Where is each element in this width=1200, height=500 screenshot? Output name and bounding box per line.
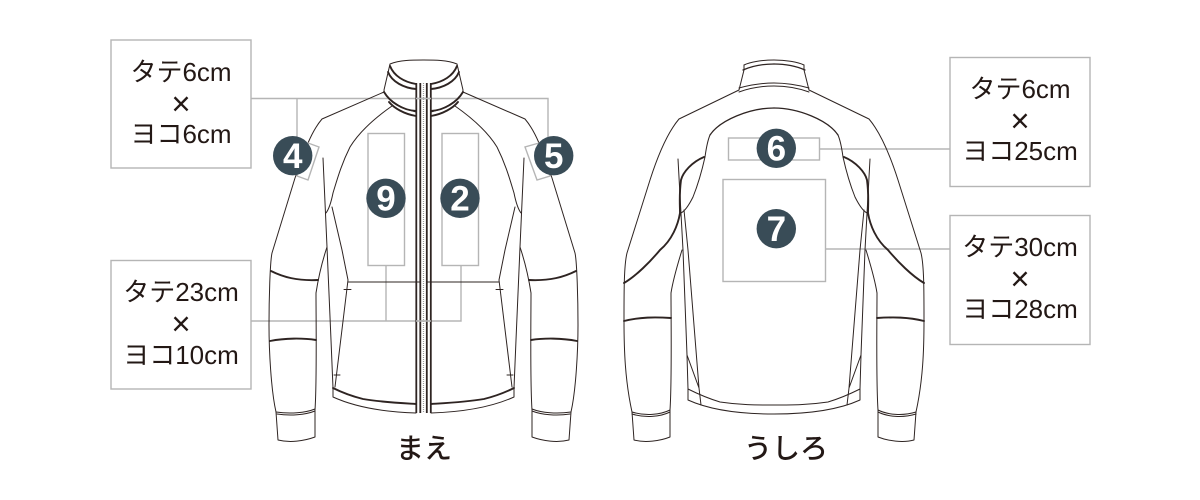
size box: chest: タテ23cm xyxy=(123,277,239,307)
jacket back xyxy=(624,60,924,441)
size box: chest: ヨコ10cm xyxy=(123,340,239,370)
badge 6 xyxy=(757,129,796,168)
jacket front xyxy=(269,60,578,441)
size box: sleeves: × xyxy=(171,85,191,122)
size box: back: ヨコ28cm xyxy=(962,294,1078,324)
badge 9: 9 xyxy=(376,180,396,218)
size box: back xyxy=(950,216,1090,344)
badge 5 xyxy=(534,136,573,176)
badge 7: 7 xyxy=(767,210,786,249)
size box: chest xyxy=(111,260,251,389)
badge 4: 4 xyxy=(283,137,303,176)
size box: sleeves: タテ6cm xyxy=(130,57,232,87)
size box: back neck: × xyxy=(1010,102,1030,139)
badge 4 xyxy=(273,136,312,176)
size box: back: × xyxy=(1010,260,1030,297)
leader lines xyxy=(251,98,950,321)
caption: back: うしろ xyxy=(744,433,828,464)
size box: sleeves: ヨコ6cm xyxy=(130,119,232,149)
size box: back: タテ30cm xyxy=(962,232,1078,262)
print area rectangles xyxy=(297,134,826,282)
size box: back neck: タテ6cm xyxy=(969,74,1071,104)
size box: chest: × xyxy=(171,305,191,342)
badge 9 xyxy=(366,179,406,218)
badge 5: 5 xyxy=(544,137,563,176)
badge 6: 6 xyxy=(767,130,786,168)
size box: back neck: ヨコ25cm xyxy=(962,136,1078,166)
size box: back neck xyxy=(950,58,1090,186)
size box: sleeves xyxy=(111,40,251,168)
badge 7 xyxy=(757,209,796,249)
badge 2 xyxy=(440,179,480,218)
badge 2: 2 xyxy=(450,180,470,218)
front zipper xyxy=(416,83,431,413)
caption: front: まえ xyxy=(396,433,452,464)
